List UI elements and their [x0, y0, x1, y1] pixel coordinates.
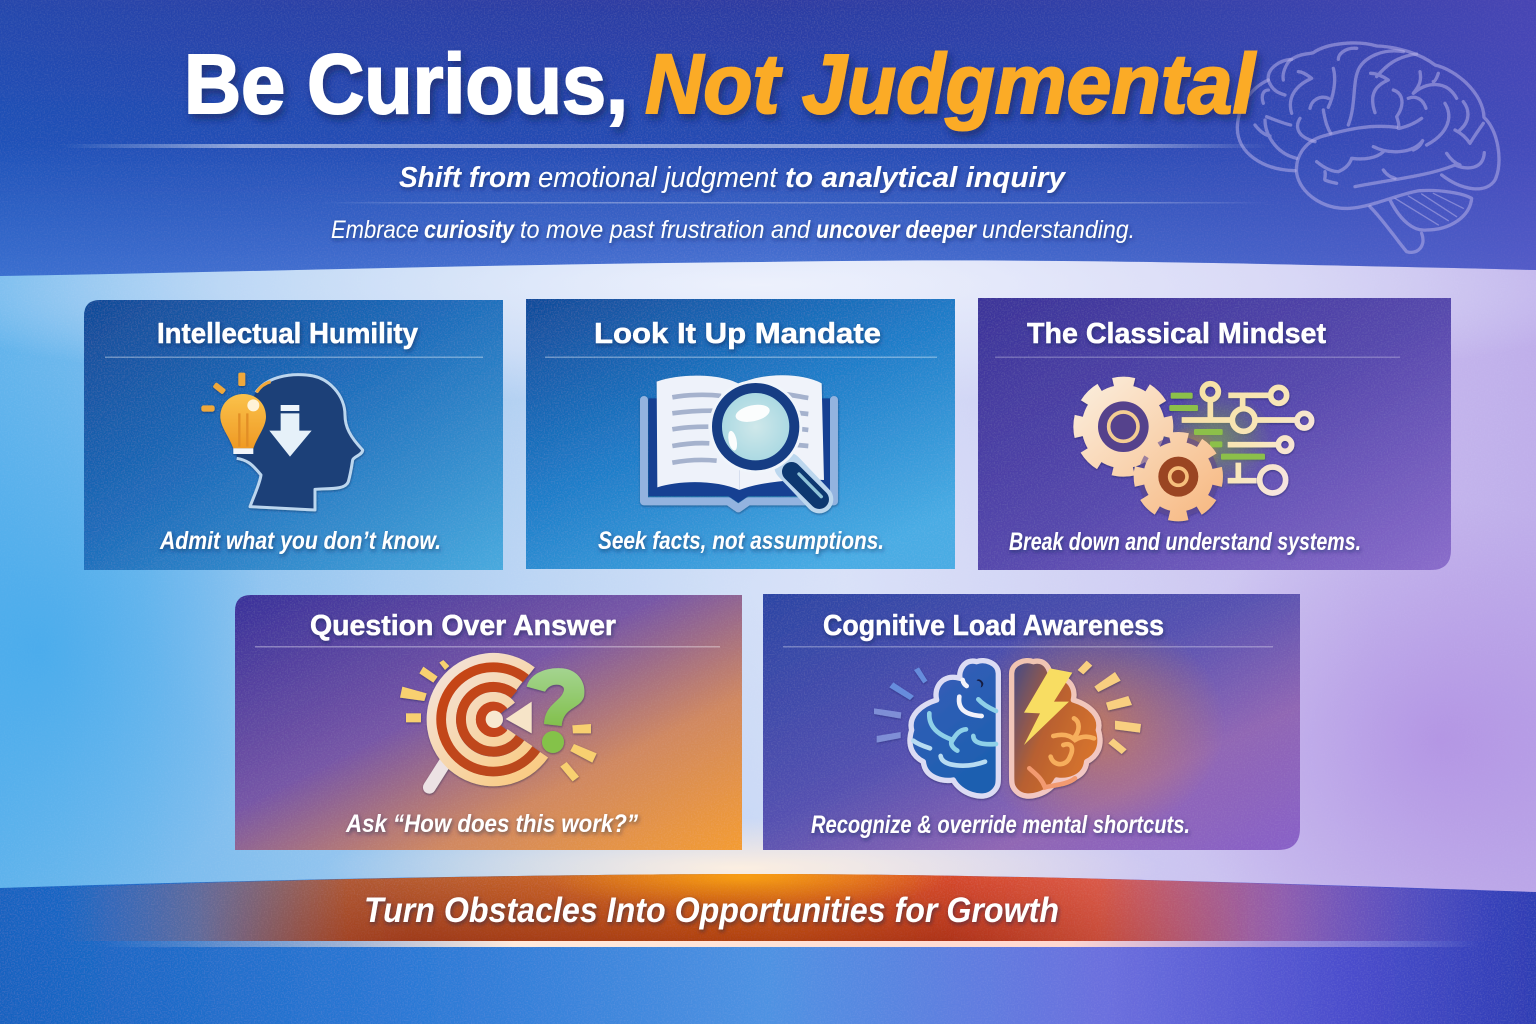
title — [184, 37, 1257, 131]
banner text: Turn Obstacles Into Opportunities for Growth — [364, 891, 1059, 930]
icon: target with question mark — [400, 658, 597, 787]
icon: brain watermark — [1237, 43, 1499, 252]
panel: look it up mandate — [526, 299, 955, 569]
tagline: understanding. — [982, 216, 1135, 244]
caption: Break down and understand systems. — [1009, 528, 1361, 556]
banner: bottom call to action — [78, 874, 1464, 947]
panel: question over answer — [235, 595, 742, 850]
heading: question over answer: Question Over Answer — [310, 610, 616, 642]
heading: intellectual humility: Intellectual Humility — [157, 318, 418, 350]
heading: cognitive load awareness: Cognitive Load Awareness — [823, 610, 1164, 642]
caption: Recognize & override mental shortcuts. — [811, 811, 1190, 839]
tagline — [331, 216, 1135, 244]
bottom background band — [0, 874, 1536, 1024]
tagline: Embrace — [331, 216, 419, 244]
caption: Ask “How does this work?” — [345, 810, 638, 838]
heading: the classical mindset: The Classical Mindset — [1027, 318, 1326, 350]
subtitle: Shift from — [399, 162, 531, 194]
icon: split brain with lightning — [874, 661, 1141, 796]
caption: Admit what you don’t know. — [159, 527, 441, 555]
title: Not Judgmental — [645, 37, 1257, 131]
tagline: to move past frustration and — [520, 216, 811, 244]
subtitle: emotional judgment — [538, 162, 779, 194]
heading: look it up mandate: Look It Up Mandate — [594, 318, 881, 350]
tagline: curiosity — [424, 216, 515, 244]
icon: open book with magnifying glass — [644, 375, 834, 508]
tagline: uncover deeper — [816, 216, 977, 244]
icon: head with light bulb and down arrow — [201, 373, 363, 510]
subtitle: to analytical inquiry — [785, 162, 1067, 194]
title: Be Curious, — [184, 37, 628, 131]
panel: the classical mindset — [978, 298, 1451, 570]
subtitle — [399, 162, 1067, 194]
header band — [0, 0, 1536, 276]
caption: Seek facts, not assumptions. — [598, 527, 884, 555]
icon: gears and circuit — [1081, 384, 1312, 517]
subtitle divider — [320, 202, 1270, 204]
panel: intellectual humility — [84, 300, 503, 570]
title divider — [60, 144, 1270, 148]
panel: cognitive load awareness — [763, 594, 1300, 850]
